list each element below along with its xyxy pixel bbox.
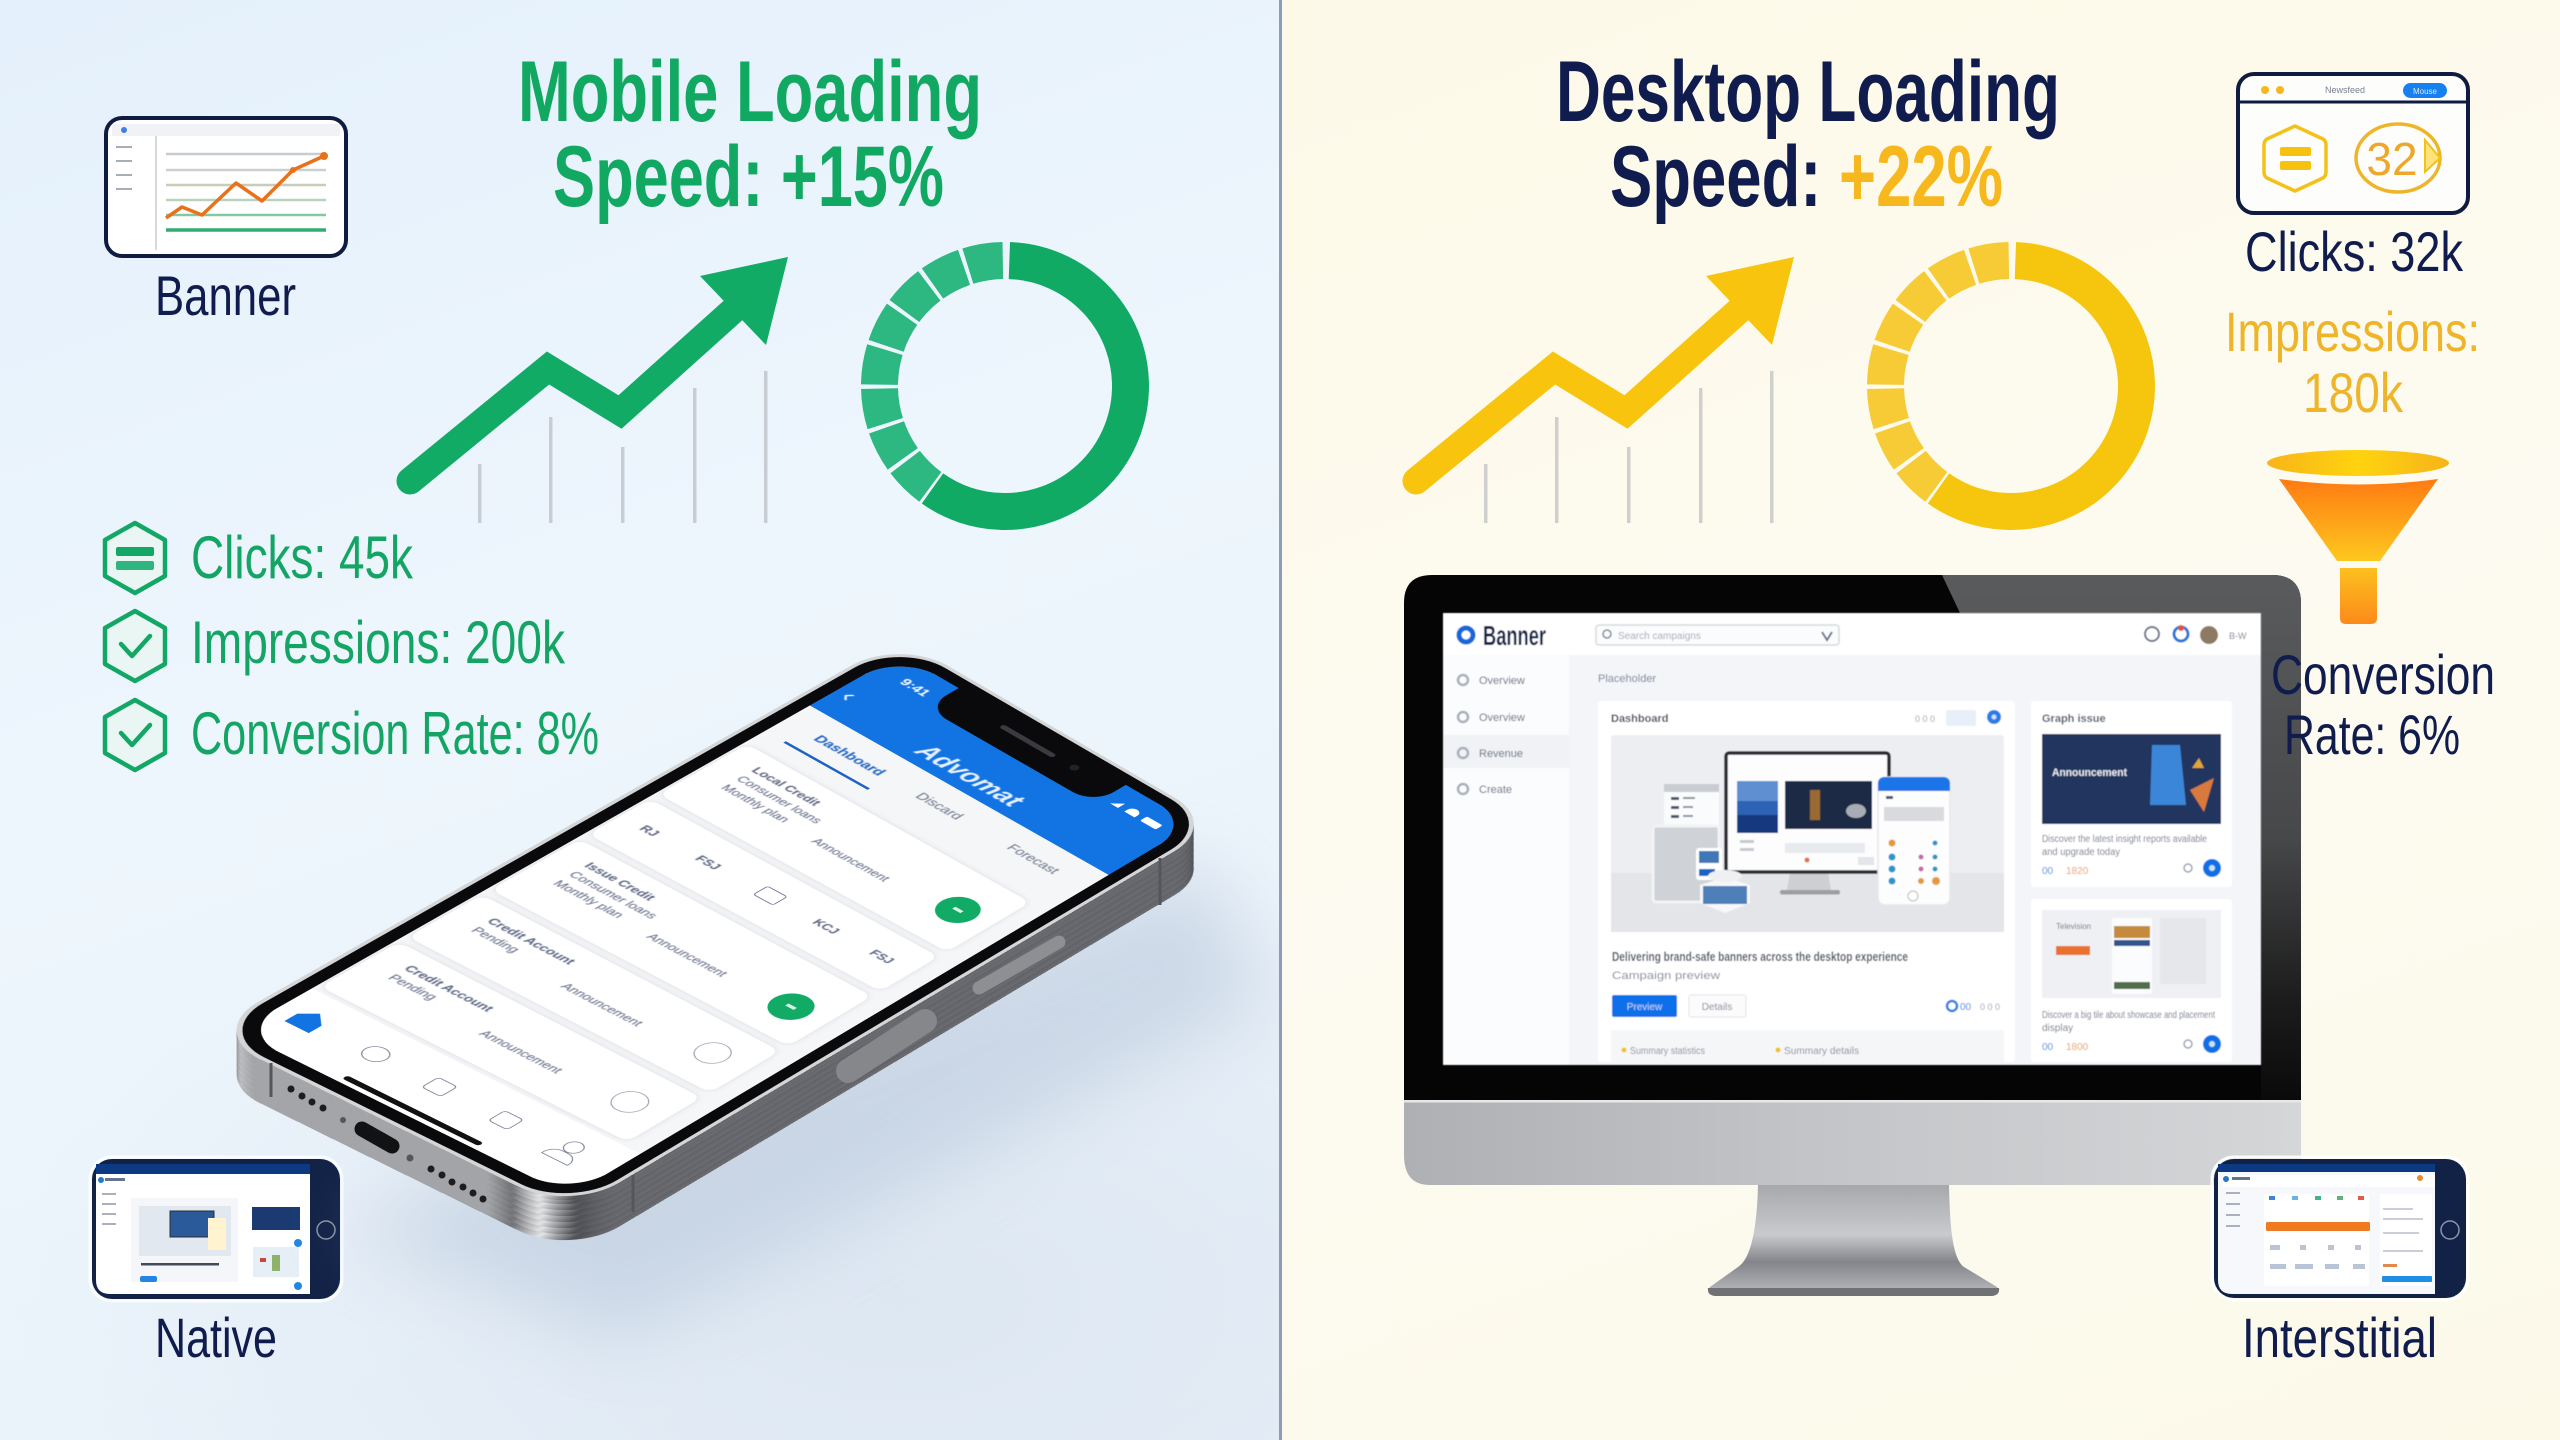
main card: 00 xyxy=(1960,1002,1972,1013)
phone xyxy=(236,654,1194,1240)
list card one: Announcement xyxy=(808,836,894,883)
stat: clicks 45k: Clicks: 45k xyxy=(191,524,414,591)
dashboard header: Banner xyxy=(1483,620,1546,651)
stat: impressions 200k xyxy=(105,609,566,681)
list card three: Announcement xyxy=(643,931,731,979)
bar guides: mobile chart xyxy=(478,371,768,523)
main card xyxy=(1598,701,2015,1062)
sidebar: Create xyxy=(1479,784,1512,796)
side card two xyxy=(2031,899,2232,1062)
monitor sheen xyxy=(1942,575,2301,1100)
icon: interstitial ad thumbnail xyxy=(2212,1157,2468,1300)
list card one xyxy=(659,744,1030,952)
dashboard header: Search campaigns xyxy=(1618,631,1701,642)
list card five: Credit Account xyxy=(401,963,498,1014)
list card two: FSJ xyxy=(866,948,898,966)
list card five xyxy=(320,942,702,1142)
icon: clicks card: Newsfeed xyxy=(2325,85,2365,95)
monitor bezel xyxy=(1404,575,2301,1100)
side card two: 00 xyxy=(2042,1042,2054,1053)
list card two: KCJ xyxy=(809,917,843,936)
main card: 0 0 0 xyxy=(1915,714,1935,724)
side card two: 1800 xyxy=(2066,1042,2089,1053)
phone notch xyxy=(938,688,1126,797)
main card: Dashboard xyxy=(1611,713,1668,725)
side card two: Discover a big tile about showcase and placement xyxy=(2042,1010,2215,1021)
hero stand xyxy=(1787,872,1831,890)
label: conversion rate 6% xyxy=(2271,643,2495,766)
list card three: Issue Credit xyxy=(581,860,659,903)
list card two xyxy=(588,799,939,991)
app bottom nav xyxy=(260,988,640,1184)
list card one: Local Credit xyxy=(748,765,824,808)
label: clicks 32k: Clicks: 32k xyxy=(2245,220,2464,283)
side card one: Announcement xyxy=(2052,767,2127,779)
bar guides: desktop chart xyxy=(1484,371,1774,523)
stat: impressions 200k: Impressions: 200k xyxy=(191,609,566,676)
icon: banner ad card xyxy=(106,118,346,256)
app header xyxy=(810,657,1189,875)
stat: clicks 45k xyxy=(105,523,414,593)
phone screen xyxy=(260,666,1174,1184)
hero tablet xyxy=(1653,826,1719,902)
label: banner: Banner xyxy=(155,264,296,327)
main card: Summary statistics xyxy=(1630,1046,1705,1057)
list card four: Pending xyxy=(468,925,524,955)
hero document xyxy=(1664,784,1719,826)
list card five: Pending xyxy=(385,972,441,1002)
list card four xyxy=(408,895,780,1093)
panel: mobile background xyxy=(0,0,1279,1440)
sidebar: Overview xyxy=(1479,712,1525,724)
side card one: 00 xyxy=(2042,866,2054,877)
label: impressions 180k: Impressions: xyxy=(2225,300,2480,363)
main card: Delivering brand-safe banners across the desktop experience xyxy=(1612,949,1908,964)
list card two: FSJ xyxy=(692,853,725,872)
dashboard header xyxy=(1443,613,2261,655)
main card: 0 0 0 xyxy=(1980,1002,2000,1012)
title: desktop loading speed xyxy=(1556,44,2060,225)
monitor screen xyxy=(1443,613,2261,1065)
chart: desktop donut xyxy=(1835,210,2187,562)
sidebar: Revenue xyxy=(1479,748,1523,760)
main card: Campaign preview xyxy=(1612,970,1720,982)
list card four: Credit Account xyxy=(484,916,579,966)
icon: native ad thumbnail xyxy=(90,1157,342,1301)
list card one: Consumer loans xyxy=(733,774,826,825)
label: conversion rate 6%: Rate: 6% xyxy=(2284,703,2460,766)
monitor xyxy=(1404,575,2301,1296)
side card one: Discover the latest insight reports available xyxy=(2042,834,2207,845)
list card three: Monthly plan xyxy=(550,878,628,920)
title: mobile loading speed: Mobile Loading xyxy=(518,44,982,140)
side card one: Graph issue xyxy=(2042,713,2106,725)
main card: Summary details xyxy=(1784,1046,1859,1057)
microphone dots xyxy=(340,1117,414,1162)
side card two: Television xyxy=(2056,922,2091,931)
main card: Preview xyxy=(1627,1002,1663,1013)
charging port xyxy=(362,1129,392,1146)
sidebar xyxy=(1443,655,1569,1065)
list card four: Announcement xyxy=(557,981,647,1028)
side card one: 1820 xyxy=(2066,866,2089,877)
monitor screen: Placeholder xyxy=(1598,673,1656,685)
list card two: RJ xyxy=(636,823,663,838)
app header: ‹ xyxy=(833,687,865,705)
speaker holes xyxy=(288,1086,486,1202)
label: impressions 180k: 180k xyxy=(2303,361,2404,424)
app tabs: Discard xyxy=(911,790,967,822)
phone screen: Dashboard xyxy=(809,733,889,778)
phone face xyxy=(236,654,1194,1196)
dashboard header: B-W xyxy=(2229,631,2247,641)
hero monitor xyxy=(1726,752,1889,872)
list card three: Consumer loans xyxy=(565,869,661,921)
side card one: and upgrade today xyxy=(2042,847,2120,858)
label: conversion rate 6%: Conversion xyxy=(2271,643,2495,706)
title: mobile loading speed: Speed: +15% xyxy=(553,129,944,225)
phone side details xyxy=(270,858,1162,1212)
arrow: mobile growth xyxy=(410,257,788,481)
app header: 9:41 xyxy=(895,676,934,699)
side card two: display xyxy=(2042,1023,2073,1034)
arrow: desktop growth xyxy=(1416,257,1794,481)
icon: clicks card xyxy=(2238,74,2468,213)
monitor chin highlight xyxy=(1404,1100,2301,1102)
list card three xyxy=(491,839,872,1046)
label: native: Native xyxy=(155,1306,277,1369)
app tabs xyxy=(783,734,1060,874)
panel: desktop background xyxy=(1282,0,2560,1440)
title: desktop loading speed: Desktop Loading xyxy=(1556,44,2060,140)
side card one xyxy=(2031,701,2232,887)
shadow: phone xyxy=(378,863,1266,1344)
hero small device xyxy=(1696,848,1750,913)
volume pill xyxy=(848,1021,925,1071)
stat: conversion rate 8% xyxy=(105,700,599,770)
monitor chin xyxy=(1404,1099,2301,1185)
app header: Advomat xyxy=(908,740,1031,810)
side button xyxy=(979,942,1059,988)
title: desktop loading speed: Speed: +22% xyxy=(1610,129,2003,225)
list card one: Monthly plan xyxy=(718,782,793,824)
title: mobile loading speed xyxy=(518,44,982,225)
sidebar: Overview xyxy=(1479,675,1525,687)
monitor stand xyxy=(1708,1185,1999,1296)
main card: Details xyxy=(1702,1002,1732,1013)
list card five: Announcement xyxy=(476,1028,566,1075)
divider xyxy=(1279,0,1282,1440)
hero phone xyxy=(1878,777,1950,905)
label: impressions 180k xyxy=(2225,300,2480,424)
icon: funnel xyxy=(2267,450,2449,624)
phone metal body xyxy=(236,826,1194,1240)
chart: mobile donut xyxy=(829,210,1181,562)
icon: clicks card: Mouse xyxy=(2413,87,2438,96)
hero image xyxy=(1611,735,2004,932)
icon: clicks card: 32 xyxy=(2366,133,2418,185)
stat: conversion rate 8%: Conversion Rate: 8% xyxy=(191,700,599,767)
label: interstitial: Interstitial xyxy=(2242,1306,2437,1369)
phone screen: Forecast xyxy=(1003,842,1063,876)
metal seams xyxy=(271,858,1160,1212)
